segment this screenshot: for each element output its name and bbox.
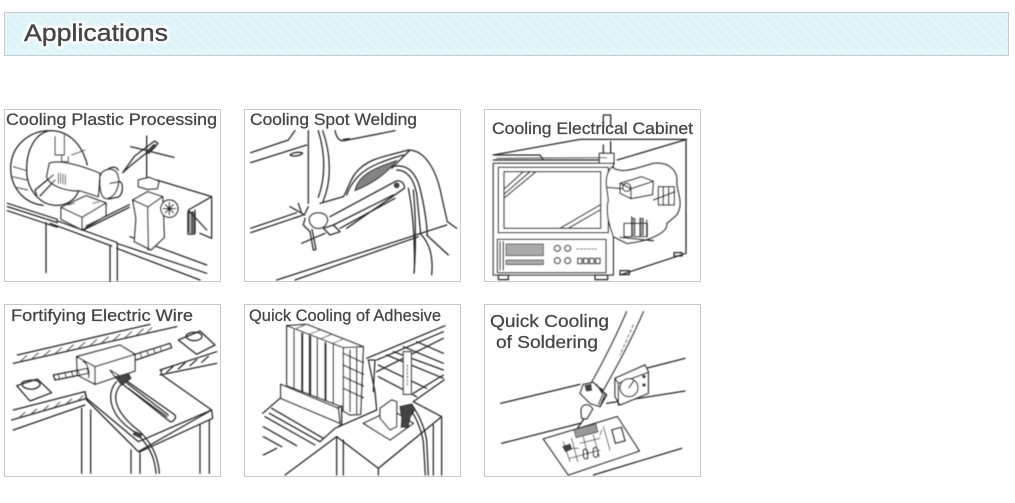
panel: Quick Cooling of Adhesive (244, 304, 460, 476)
label: Cooling Spot Welding (250, 111, 417, 129)
panel: Fortifying Electric Wire (4, 304, 220, 476)
panel: Cooling Electrical Cabinet (484, 110, 700, 282)
heading banner: Applications (4, 12, 1008, 56)
label: Cooling Electrical Cabinet (492, 120, 693, 138)
label: Fortifying Electric Wire (11, 307, 193, 325)
label: Quick Cooling (490, 311, 609, 331)
label: Cooling Plastic Processing (6, 111, 217, 129)
heading text: Applications (24, 20, 168, 47)
panel: Cooling Spot Welding (244, 110, 460, 282)
panel: Quick Cooling of Soldering (484, 304, 700, 476)
panel: Cooling Plastic Processing (4, 110, 220, 282)
label (490, 311, 609, 352)
label: of Soldering (496, 332, 598, 352)
label: Quick Cooling of Adhesive (249, 307, 441, 325)
